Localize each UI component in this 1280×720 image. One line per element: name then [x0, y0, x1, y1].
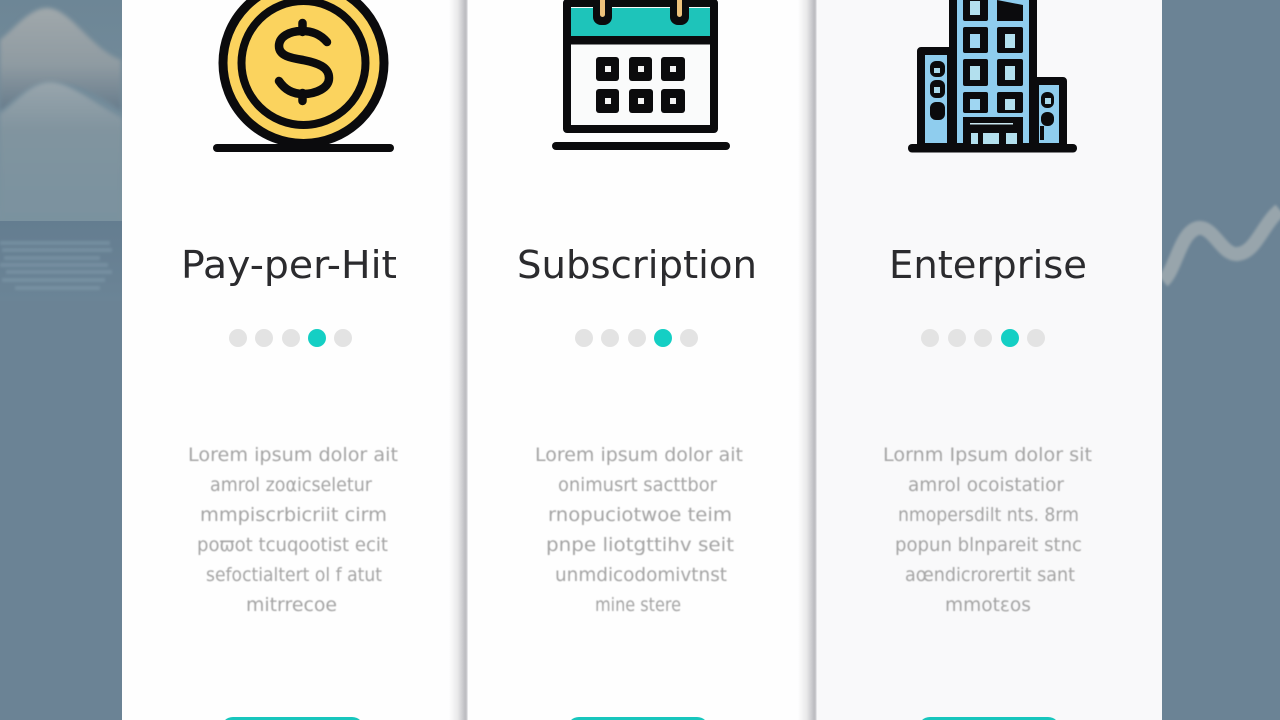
body text: amrol zoαicseletur — [210, 474, 372, 496]
body text: Lorem ipsum dolor ait — [188, 444, 398, 466]
right wave texture — [1163, 210, 1280, 281]
body text: amrol ocoistatior — [908, 474, 1064, 496]
body text — [188, 444, 398, 616]
pagination dots — [921, 329, 1045, 347]
body text: pnpe liotgttihv seit — [546, 534, 734, 556]
left hills texture — [0, 0, 122, 301]
body text: sefoctialtert ol f atut — [206, 564, 382, 586]
body text: Lornm Ipsum dolor sit — [883, 444, 1092, 466]
button — [918, 717, 1060, 720]
pagination dots — [229, 329, 352, 347]
panel: Subscription — [468, 0, 817, 720]
body text: poϖot tcuqootist ecit — [197, 534, 388, 556]
body text: mine stere — [595, 594, 681, 616]
panel: Enterprise — [817, 0, 1162, 720]
body text — [535, 444, 743, 616]
icon: office building — [908, 0, 1077, 152]
body text — [883, 444, 1092, 616]
body text: nmopersdilt nts. 8rm — [898, 504, 1079, 526]
body text: onimusrt sacttbor — [558, 474, 717, 496]
body text: popun blnpareit stnc — [895, 534, 1082, 556]
pagination dots — [575, 329, 698, 347]
body text: Lorem ipsum dolor ait — [535, 444, 743, 466]
panel: Pay-per-Hit — [122, 0, 468, 720]
body text: mitrrecoe — [246, 594, 337, 616]
heading: Pay-per-Hit — [181, 243, 397, 287]
heading: Enterprise — [889, 243, 1087, 287]
body text: aœndicrorertit sant — [905, 564, 1075, 586]
heading: Subscription — [517, 243, 757, 287]
body text: mmotεos — [945, 594, 1031, 616]
body text: mmpiscrbicriit cirm — [200, 504, 387, 526]
button — [221, 717, 364, 720]
button — [567, 717, 709, 720]
icon: coin — [213, 0, 394, 152]
body text: rnopuciotwoe teim — [548, 504, 732, 526]
body text: unmdicodomivtnst — [555, 564, 727, 586]
icon: calendar — [552, 0, 730, 150]
